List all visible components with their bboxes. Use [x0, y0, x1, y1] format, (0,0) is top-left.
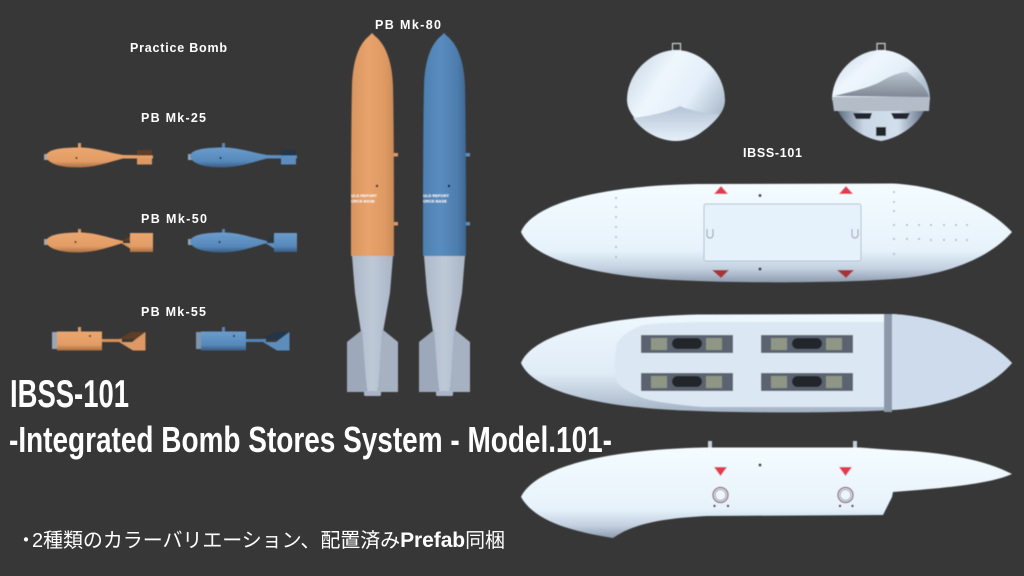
pod underside view [521, 314, 1012, 412]
bomb: Mk-25 blue [188, 143, 297, 168]
heading: Practice Bomb: Practice Bomb [130, 41, 227, 55]
rack: front upper [641, 335, 733, 353]
bomb: Mk-55 blue [196, 327, 290, 350]
pod side view [521, 441, 1012, 538]
bomb: Mk-80 blue: ORCE BASE [423, 198, 447, 204]
rack: rear upper [761, 335, 853, 353]
pod front view [627, 44, 725, 141]
bomb: Mk-80 blue [419, 33, 470, 396]
rack: rear lower [761, 373, 853, 391]
bomb: Mk-80 orange: ULD REPORT [351, 193, 378, 198]
label: PB Mk-50: PB Mk-50 [141, 212, 207, 226]
label: PB Mk-80: PB Mk-80 [375, 18, 441, 32]
bomb: Mk-25 orange [44, 143, 153, 168]
bomb: Mk-50 orange [44, 229, 153, 252]
label: PB Mk-25: PB Mk-25 [141, 111, 206, 125]
note: color variations: ・ [16, 530, 36, 552]
bomb: Mk-55 orange [52, 327, 146, 350]
label: PB Mk-55: PB Mk-55 [141, 305, 206, 319]
label: IBSS-101: IBSS-101 [743, 146, 802, 160]
pod top view [521, 184, 1012, 282]
bomb: Mk-80 orange [347, 33, 398, 396]
note: color variations: 2種類のカラーバリエーション、配置済みPrefab同梱 [32, 529, 505, 552]
title: IBSS-101: IBSS-101 [10, 373, 129, 416]
bomb: Mk-80 blue: ULD REPORT [423, 193, 450, 198]
pod rear view [832, 44, 930, 141]
subtitle: -Integrated Bomb Stores System - Model.101- [9, 419, 612, 460]
bomb: Mk-50 blue [188, 229, 297, 252]
rack: front lower [641, 373, 733, 391]
bomb: Mk-80 orange: ORCE BASE [351, 198, 375, 204]
